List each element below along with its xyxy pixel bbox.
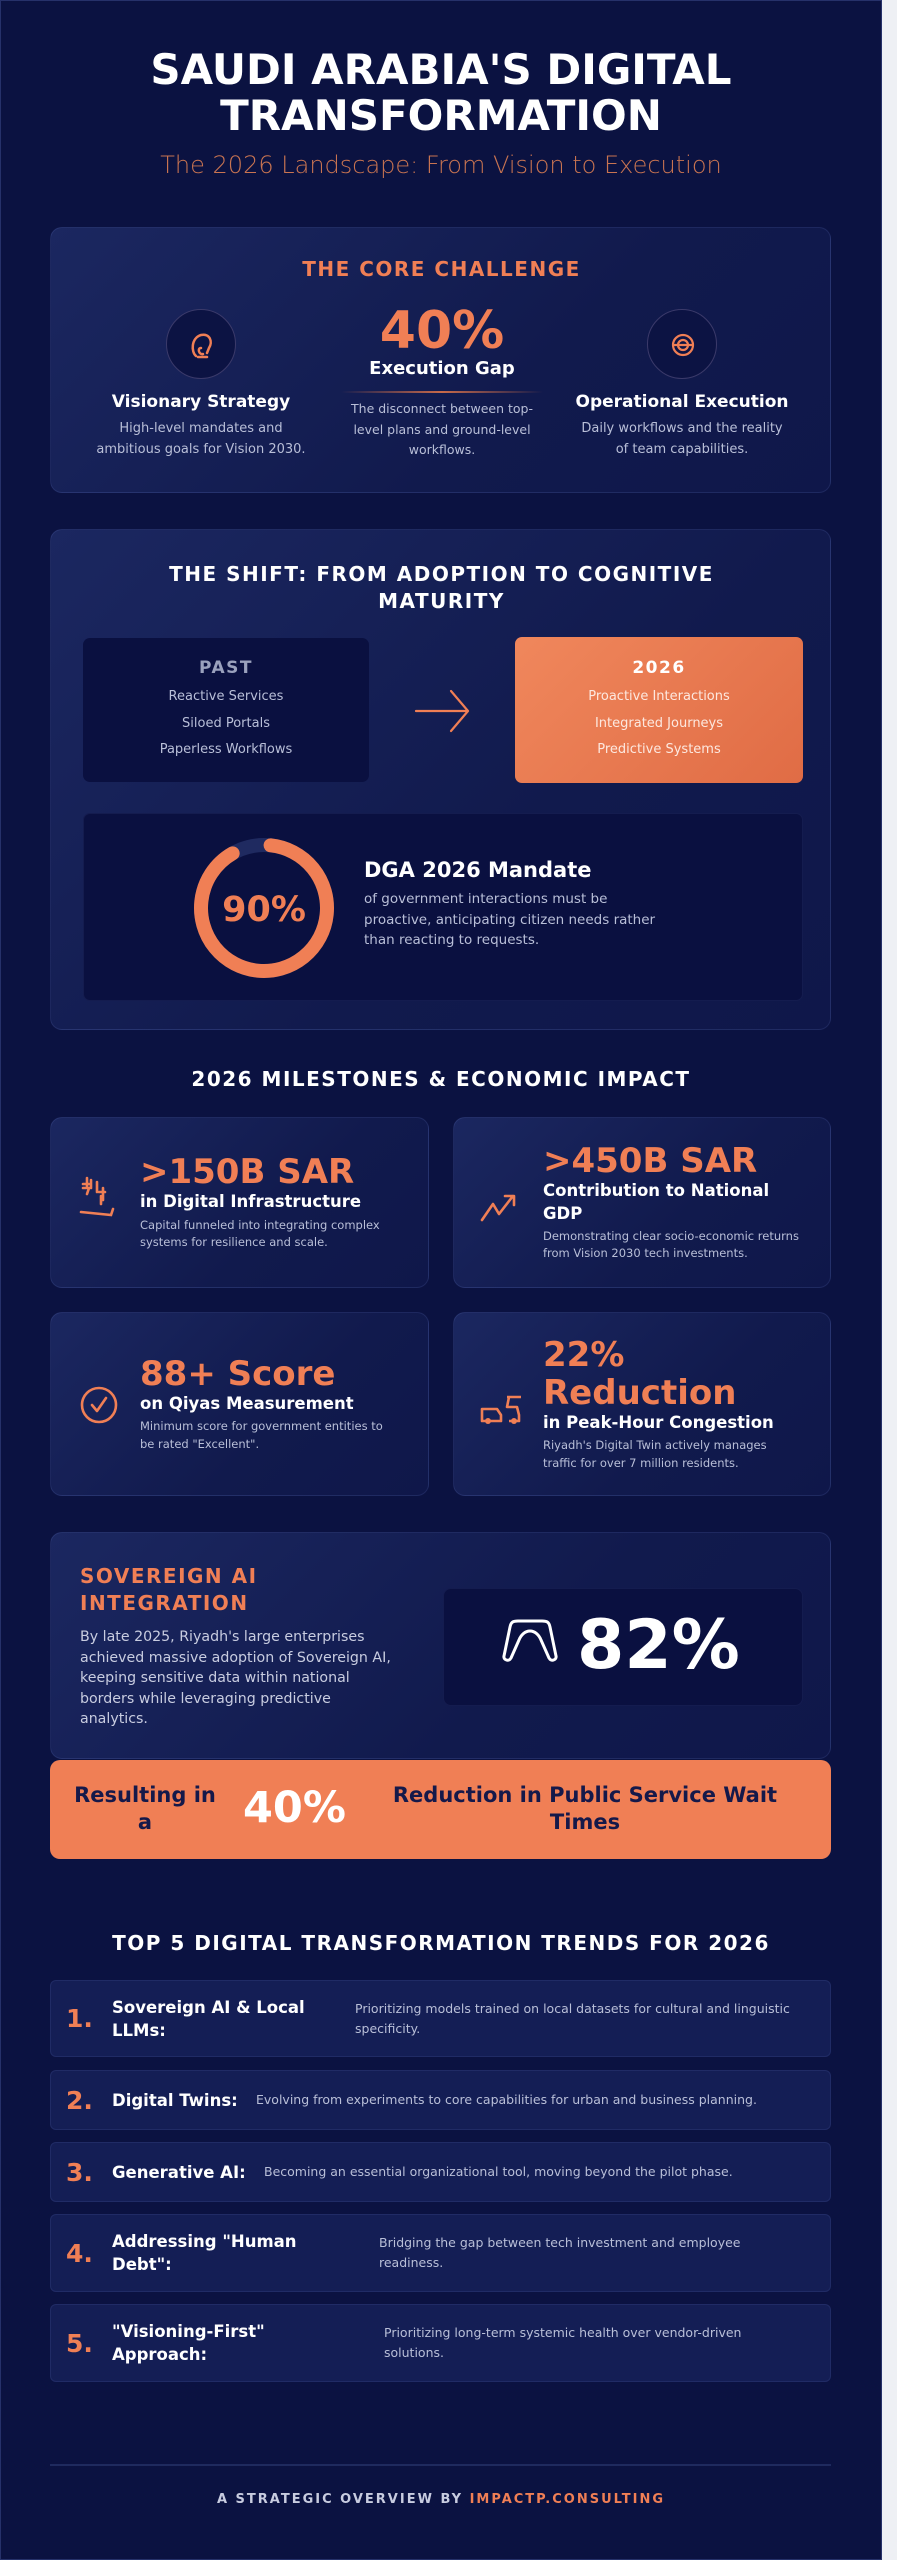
- heading: core challenge: THE CORE CHALLENGE: [302, 257, 581, 281]
- text: mandate: of government interactions must be: [364, 891, 607, 907]
- card: 450B SAR: [453, 1117, 831, 1288]
- text: mandate: [364, 858, 656, 948]
- box: 2026: 2026: [632, 658, 686, 678]
- icon: visionary head: [166, 309, 236, 379]
- card: 150B SAR: >150B SAR: [140, 1152, 354, 1192]
- trend 4: Debt":: [112, 2255, 172, 2274]
- trend 1: Prioritizing models trained on local datasets for cultural and linguistic specificity.: [355, 2000, 790, 2036]
- trend 2: [50, 2070, 831, 2130]
- card: 88+ score: Minimum score for government entities to: [140, 1419, 383, 1433]
- text: sovereign body: By late 2025, Riyadh's large enterprises: [80, 1629, 364, 1645]
- callout: 40% reduction: Reduction in Public Service Wait: [393, 1783, 777, 1807]
- box: 2026: Proactive Interactions: [588, 689, 730, 704]
- card: 150B SAR: in Digital Infrastructure: [140, 1192, 361, 1211]
- icon: sovereign AI: [502, 1620, 558, 1662]
- stat: 40% execution gap: The disconnect between top-: [351, 401, 533, 416]
- callout: 40% reduction: Times: [550, 1810, 620, 1834]
- icon: trend up: [480, 1194, 516, 1222]
- box: 2026: Integrated Journeys: [595, 716, 723, 730]
- text: visionary strategy: [96, 392, 306, 457]
- text: sovereign body: analytics.: [80, 1711, 148, 1727]
- card: 450B SAR: >450B SAR: [543, 1141, 757, 1181]
- text: visionary strategy: Visionary Strategy: [112, 392, 290, 412]
- chart: 90% donut: 90%: [222, 890, 306, 930]
- box: past: PAST: [199, 658, 253, 678]
- icon: traffic: [480, 1396, 521, 1424]
- box: past: [83, 638, 369, 782]
- heading: sovereign AI: [80, 1564, 258, 1615]
- card: 450B SAR: from Vision 2030 tech investments.: [543, 1246, 748, 1260]
- card: 88+ score: be rated "Excellent".: [140, 1437, 259, 1451]
- trend 1: Sovereign AI & Local: [112, 1998, 305, 2016]
- text: operational execution: Daily workflows and the reality: [581, 421, 783, 436]
- box: past: Siloed Portals: [182, 716, 270, 730]
- stat: 40% execution gap: level plans and ground-level: [353, 422, 531, 436]
- icon: infrastructure: [80, 1176, 114, 1216]
- card: 22% reduction: [453, 1312, 831, 1496]
- text: sovereign body: borders while leveraging predictive: [80, 1690, 331, 1706]
- trend 4: Addressing "Human: [112, 2232, 297, 2251]
- stat: 40% execution gap: [346, 301, 538, 457]
- panel: core challenge: [50, 227, 831, 493]
- callout: 40% reduction: a: [138, 1810, 152, 1834]
- heading: top 5 trends: TOP 5 DIGITAL TRANSFORMATION TRENDS FOR 2026: [112, 1931, 770, 1955]
- text: operational execution: of team capabilities.: [616, 442, 748, 457]
- trend 5: "Visioning-First": [112, 2322, 265, 2341]
- subtitle: The 2026 Landscape: From Vision to Execution: [160, 151, 722, 179]
- text: operational execution: Operational Execution: [576, 392, 788, 412]
- icon: target: [647, 309, 717, 379]
- trend 2: 2.: [66, 2086, 93, 2114]
- card: 88+ score: [50, 1312, 429, 1496]
- box: 2026: [515, 637, 803, 783]
- card: 150B SAR: [50, 1117, 429, 1288]
- heading: the shift: THE SHIFT: FROM ADOPTION TO COGNITIVE: [169, 562, 714, 586]
- icon: check circle: [80, 1386, 118, 1424]
- trend 4: Bridging the gap between tech investment and employee readiness.: [379, 2235, 740, 2270]
- box: DGA mandate: [83, 813, 803, 1001]
- text: sovereign body: keeping sensitive data within national: [80, 1670, 350, 1686]
- callout: 40% reduction: [50, 1760, 831, 1859]
- card: 150B SAR: systems for resilience and scale.: [140, 1235, 328, 1249]
- arrow: [414, 690, 470, 732]
- trend 3: Generative AI:: [112, 2162, 246, 2182]
- card: 88+ score: 88+ Score: [140, 1354, 335, 1394]
- card: 22% reduction: Riyadh's Digital Twin actively manages: [543, 1438, 767, 1452]
- text: operational execution: [576, 392, 788, 457]
- trend 5: Approach:: [112, 2345, 207, 2364]
- trend 2: Digital Twins:: [112, 2090, 238, 2110]
- trend 3: Becoming an essential organizational tool, moving beyond the pilot phase.: [264, 2164, 733, 2179]
- heading: sovereign AI: SOVEREIGN AI: [80, 1564, 258, 1588]
- card: 22% reduction: traffic for over 7 million residents.: [543, 1456, 739, 1470]
- trend 4: [50, 2214, 831, 2292]
- callout: 40% reduction: Resulting in: [74, 1783, 216, 1807]
- trend 5: [50, 2304, 831, 2382]
- stat box: 82%: [443, 1588, 803, 1706]
- panel: the shift: [50, 529, 831, 1030]
- stat: 40% execution gap: 40%: [380, 301, 504, 361]
- heading: the shift: [169, 562, 714, 613]
- box: past: Paperless Workflows: [160, 742, 292, 757]
- text: mandate: proactive, anticipating citizen needs rather: [364, 912, 655, 928]
- card: 450B SAR: Demonstrating clear socio-economic returns: [543, 1229, 799, 1243]
- trend 2: Evolving from experiments to core capabilities for urban and business planning.: [256, 2092, 757, 2107]
- text: visionary strategy: High-level mandates and: [119, 421, 283, 436]
- card: 150B SAR: Capital funneled into integrating complex: [140, 1218, 380, 1232]
- trend 1: LLMs:: [112, 2020, 166, 2040]
- stat: 40% execution gap: Execution Gap: [369, 358, 515, 379]
- callout: 40% reduction: 40%: [243, 1783, 346, 1833]
- panel: sovereign AI: [50, 1532, 831, 1759]
- card: 22% reduction: in Peak-Hour Congestion: [543, 1413, 774, 1432]
- trend 5: 5.: [66, 2328, 93, 2358]
- title: SAUDI ARABIA'S DIGITAL: [150, 45, 732, 94]
- heading: milestones: 2026 MILESTONES & ECONOMIC IMPACT: [191, 1067, 691, 1091]
- title: [150, 45, 732, 140]
- text: sovereign body: achieved massive adoption of Sovereign AI,: [80, 1650, 391, 1666]
- text: visionary strategy: ambitious goals for Vision 2030.: [96, 442, 306, 457]
- trend 5: Prioritizing long-term systemic health over vendor-driven solutions.: [384, 2325, 741, 2360]
- card: 88+ score: on Qiyas Measurement: [140, 1394, 354, 1413]
- trend 3: 3.: [66, 2158, 93, 2186]
- box: past: Reactive Services: [169, 689, 283, 704]
- text: mandate: DGA 2026 Mandate: [364, 858, 592, 882]
- heading: sovereign AI: INTEGRATION: [80, 1591, 249, 1615]
- footer: A STRATEGIC OVERVIEW BY IMPACTP.CONSULTING: [217, 2492, 665, 2507]
- trend 4: 4.: [66, 2238, 93, 2268]
- stat: 40% execution gap: workflows.: [409, 442, 475, 457]
- title: TRANSFORMATION: [220, 91, 662, 140]
- card: 22% reduction: 22% Reduction: [543, 1335, 736, 1413]
- heading: the shift: MATURITY: [378, 589, 505, 613]
- stat box: 82%: 82%: [577, 1606, 740, 1685]
- trend 3: [50, 2142, 831, 2202]
- trend 1: 1.: [66, 2004, 93, 2033]
- card: 450B SAR: Contribution to National GDP: [543, 1181, 769, 1223]
- text: mandate: than reacting to requests.: [364, 932, 539, 948]
- chart: 90% donut: [194, 838, 334, 978]
- trend 1: [50, 1980, 831, 2057]
- box: 2026: Predictive Systems: [597, 742, 721, 757]
- text: sovereign body: [80, 1629, 391, 1727]
